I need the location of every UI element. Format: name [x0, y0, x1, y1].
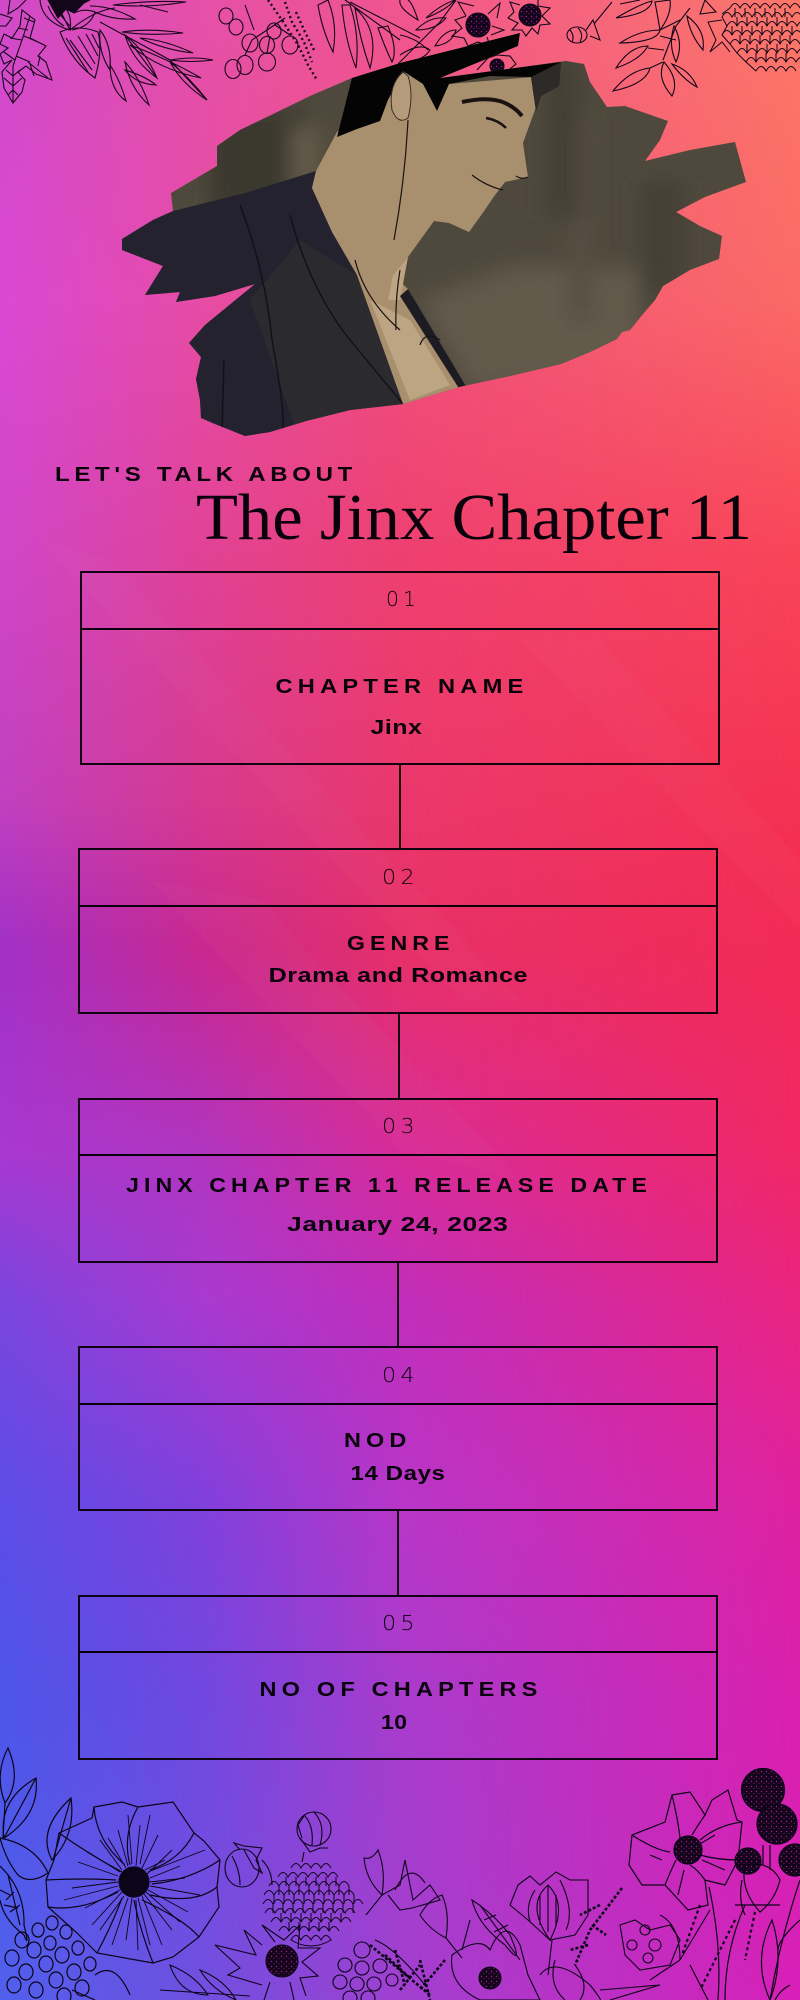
side leaves — [0, 1748, 72, 1941]
connector 1 to 2 — [399, 764, 401, 849]
ear — [391, 72, 411, 120]
bottom-left floral illustration — [0, 1748, 220, 2000]
connector 4 to 5 — [397, 1510, 399, 1596]
card 05: number of chapters — [79, 1596, 717, 1759]
blurred background shapes — [210, 60, 685, 390]
stems and leaves — [682, 1845, 800, 2000]
bottom-right flowers — [629, 1768, 800, 2000]
dark round flower heads — [735, 1768, 800, 1876]
card 01: chapter name: 01 — [386, 587, 420, 611]
card 03: release date: JINX CHAPTER 11 RELEASE DATE — [126, 1174, 652, 1197]
robe — [122, 171, 403, 436]
berry cluster — [5, 1916, 130, 2000]
portrait background — [122, 33, 746, 436]
card 01: chapter name — [81, 572, 719, 764]
sunflower — [160, 1925, 320, 2000]
connector 3 to 4 — [397, 1262, 399, 1347]
facial features — [355, 99, 528, 345]
dahlia — [263, 1864, 363, 1946]
right lapel — [400, 289, 467, 390]
rose bud — [567, 2, 612, 43]
heading: the jinx chapter 11: The Jinx Chapter 11 — [196, 481, 752, 554]
portrait brush stroke — [122, 33, 746, 436]
card 01: chapter name: Jinx — [370, 716, 423, 739]
berries sprig — [219, 0, 317, 80]
card 05: number of chapters: 10 — [381, 1711, 408, 1734]
anemone — [629, 1790, 742, 1910]
card 02: genre: Drama and Romance — [269, 964, 528, 987]
leafy branch — [613, 0, 716, 96]
card 02: genre: GENRE — [347, 932, 454, 955]
top-right floral illustration — [398, 0, 800, 96]
card 03: release date: 03 — [382, 1114, 419, 1138]
card 04: nod: NOD — [344, 1429, 412, 1452]
skin — [312, 71, 536, 404]
buds — [225, 1812, 331, 1887]
dark protea flower — [40, 0, 135, 78]
card 05: number of chapters: 05 — [382, 1611, 419, 1635]
top-left floral illustration — [0, 0, 420, 105]
upper middle leaves — [318, 0, 420, 68]
card 04: nod: 14 Days — [350, 1462, 446, 1485]
heading: let's talk about: LET'S TALK ABOUT — [55, 463, 357, 486]
card 01: chapter name: CHAPTER NAME — [276, 675, 528, 698]
small wildflowers — [620, 1910, 710, 1980]
bottom-centre tulips — [452, 1872, 710, 2000]
hair — [337, 33, 561, 137]
background streaks — [40, 540, 800, 1180]
dahlia — [708, 4, 800, 71]
card 03: release date: January 24, 2023 — [287, 1213, 508, 1236]
card 02: genre: 02 — [382, 865, 419, 889]
large poppy — [46, 1802, 220, 1963]
bottom-centre floral illustration — [160, 1812, 462, 2000]
berries and ferns — [333, 1850, 462, 2000]
sunflowers — [398, 0, 550, 73]
card 03: release date — [79, 1099, 717, 1262]
card 04: nod: 04 — [382, 1363, 419, 1387]
long narrow leaves — [100, 1, 213, 105]
card 05: number of chapters: NO OF CHAPTERS — [260, 1678, 542, 1701]
card 02: genre — [79, 849, 717, 1013]
card 04: nod — [79, 1347, 717, 1510]
connector 2 to 3 — [398, 1013, 400, 1099]
fern fronds — [0, 0, 52, 103]
